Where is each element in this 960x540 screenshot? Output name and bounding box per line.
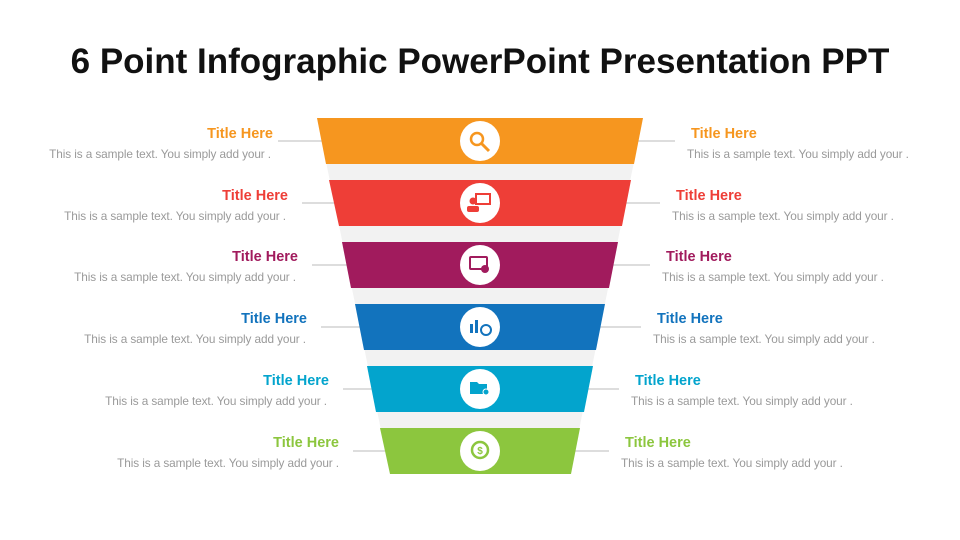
text: Title Here xyxy=(232,249,298,265)
text: This is a sample text. You simply add your . xyxy=(64,209,286,223)
left text 1 xyxy=(49,126,273,161)
band 6: $ xyxy=(477,446,483,457)
text: This is a sample text. You simply add your . xyxy=(105,394,327,408)
text: This is a sample text. You simply add your . xyxy=(49,147,271,161)
right text 3 xyxy=(662,249,884,284)
title: 6 Point Infographic PowerPoint Presentation PPT xyxy=(71,42,889,81)
right text 2 xyxy=(672,188,894,223)
text: Title Here xyxy=(666,249,732,265)
band 4 xyxy=(355,304,605,350)
band 1 xyxy=(317,118,643,164)
text: Title Here xyxy=(273,435,339,451)
text: Title Here xyxy=(207,126,273,142)
text: This is a sample text. You simply add your . xyxy=(74,270,296,284)
right text 6 xyxy=(621,435,843,470)
text: Title Here xyxy=(676,188,742,204)
text: This is a sample text. You simply add your . xyxy=(653,332,875,346)
text: Title Here xyxy=(635,373,701,389)
right text 4 xyxy=(653,311,875,346)
text: Title Here xyxy=(222,188,288,204)
text: This is a sample text. You simply add your . xyxy=(631,394,853,408)
band 6 xyxy=(380,428,580,474)
left text 5 xyxy=(105,373,329,408)
left text 3 xyxy=(74,249,298,284)
text: Title Here xyxy=(263,373,329,389)
text: Title Here xyxy=(625,435,691,451)
left text 6 xyxy=(117,435,339,470)
left text 4 xyxy=(84,311,307,346)
text: Title Here xyxy=(691,126,757,142)
text: This is a sample text. You simply add your . xyxy=(662,270,884,284)
band 5 xyxy=(367,366,593,412)
text: Title Here xyxy=(241,311,307,327)
right text 1 xyxy=(687,126,909,161)
band 2 xyxy=(329,180,631,226)
right text 5 xyxy=(631,373,853,408)
text: Title Here xyxy=(657,311,723,327)
text: This is a sample text. You simply add your . xyxy=(621,456,843,470)
text: This is a sample text. You simply add your . xyxy=(672,209,894,223)
left text 2 xyxy=(64,188,288,223)
text: This is a sample text. You simply add your . xyxy=(687,147,909,161)
band 3 xyxy=(342,242,618,288)
text: This is a sample text. You simply add your . xyxy=(84,332,306,346)
text: This is a sample text. You simply add your . xyxy=(117,456,339,470)
